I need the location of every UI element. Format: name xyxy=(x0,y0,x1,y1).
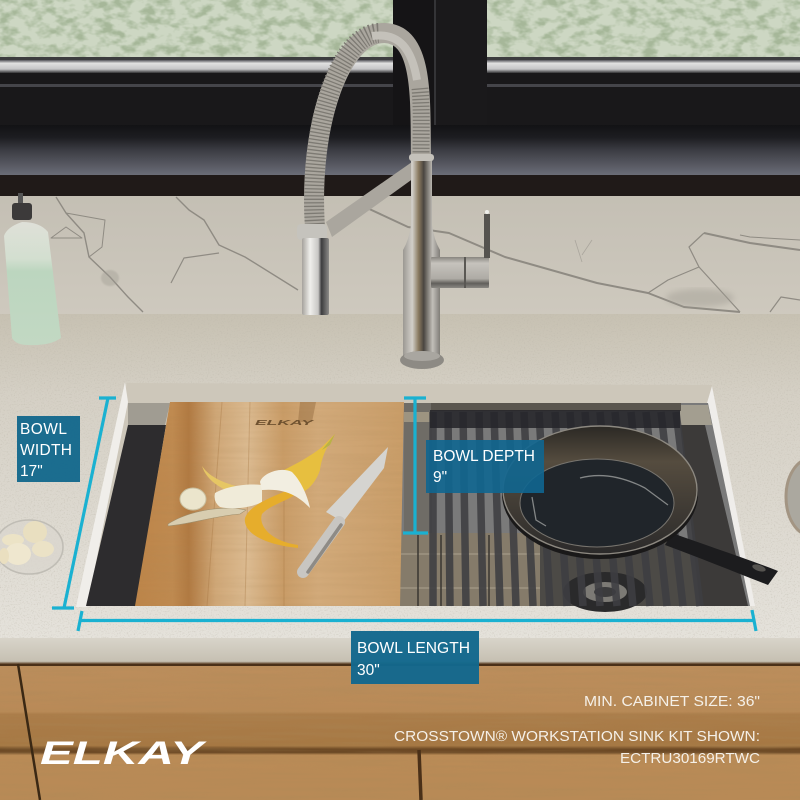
right side plate xyxy=(786,459,800,535)
kit model text: CROSSTOWN® WORKSTATION SINK KIT SHOWN: xyxy=(394,729,760,745)
kit model text: ECTRU30169RTWC xyxy=(620,751,760,767)
label: bowl width 17 inches: 17" xyxy=(20,463,43,480)
countertop xyxy=(0,314,800,664)
dimension line: bowl depth xyxy=(403,398,428,533)
dimension line: bowl width xyxy=(52,398,116,608)
chef knife xyxy=(303,447,388,572)
label: bowl depth 9 inches: BOWL DEPTH xyxy=(433,448,535,465)
soap bottle xyxy=(4,193,61,345)
label: bowl width 17 inches: WIDTH xyxy=(20,442,72,459)
label: bowl depth 9 inches xyxy=(426,440,544,493)
label: bowl width 17 inches xyxy=(17,416,80,482)
window sill xyxy=(0,125,800,196)
faucet body xyxy=(400,154,444,369)
dimension line: bowl length xyxy=(78,610,756,631)
label: bowl length 30 inches: 30" xyxy=(357,662,380,679)
banana peel and slice xyxy=(168,434,335,548)
faucet xyxy=(297,33,490,369)
cabinet size text: MIN. CABINET SIZE: 36" xyxy=(584,694,760,710)
Elkay logo: ELKAY xyxy=(40,735,207,771)
label: bowl depth 9 inches: 9" xyxy=(433,469,447,486)
left basin interior xyxy=(86,403,170,606)
right basin with grid and rolling rack xyxy=(400,403,750,612)
bowl of banana slices xyxy=(0,520,63,574)
kit model text xyxy=(394,729,760,767)
label: bowl length 30 inches: BOWL LENGTH xyxy=(357,640,470,657)
drain xyxy=(563,572,647,612)
logo engraved on board: ELKAY xyxy=(255,420,316,427)
hose spring xyxy=(314,33,421,228)
rolling rack bars xyxy=(433,412,700,606)
lever handle xyxy=(431,210,490,288)
spray head xyxy=(297,224,329,315)
label: bowl length 30 inches xyxy=(351,631,479,684)
cabinet with wood drawers xyxy=(0,664,800,800)
window frame xyxy=(0,0,800,125)
cutting board xyxy=(130,400,410,610)
sink bevel and rim xyxy=(76,382,755,607)
frying pan xyxy=(502,426,778,585)
brace arm xyxy=(326,162,414,237)
label: bowl width 17 inches: BOWL xyxy=(20,421,67,438)
marble backsplash xyxy=(0,196,800,316)
window view: foliage xyxy=(0,0,800,62)
